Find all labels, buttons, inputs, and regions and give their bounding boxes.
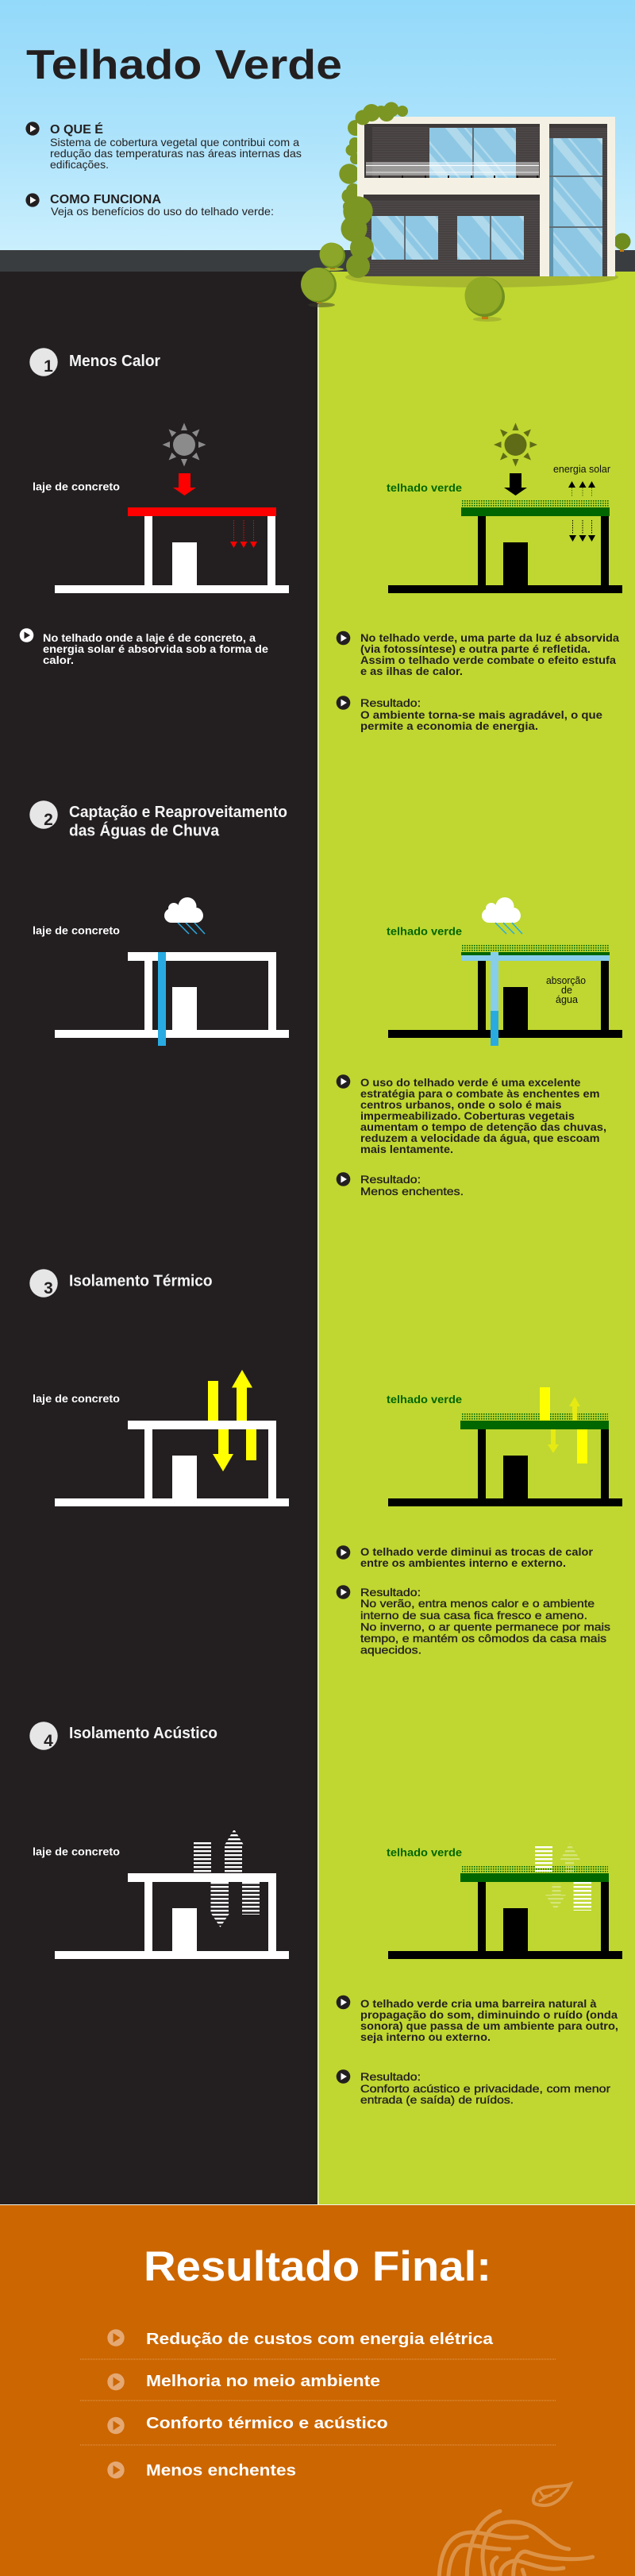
list item: enchentes: [107, 2462, 296, 2479]
arrows: reflected up: [568, 481, 595, 496]
icon: bullet: [337, 631, 350, 645]
icon: bullet: [25, 193, 40, 207]
text block: result: Resultado:: [360, 696, 421, 709]
heading: Captação e Reaproveitamento: [69, 804, 287, 821]
text block: rain explanation: estratégia para o combate às enchentes em: [360, 1087, 600, 1100]
label: laje de concreto: laje de concreto: [33, 480, 120, 492]
icon: bullet: [337, 1172, 350, 1186]
diagram: concrete house: [55, 507, 289, 593]
diagram: concrete house: [55, 1873, 289, 1959]
text block: o que é: redução das temperaturas nas áreas internas das: [50, 147, 302, 160]
text block: concrete explanation: No telhado onde a laje é de concreto, a: [43, 631, 256, 644]
text block: result: O ambiente torna-se mais agradável, o que: [360, 708, 602, 721]
text block: green roof explanation: No telhado verde, uma parte da luz é absorvida: [360, 631, 619, 644]
title: Telhado Verde: [26, 42, 342, 88]
panel: section 1 menos calor: [20, 348, 622, 732]
panel: section 2 captação de chuva: [29, 800, 622, 1197]
text block: result: Resultado:: [360, 1586, 421, 1598]
text block: rain explanation: impermeabilizado. Coberturas vegetais: [360, 1109, 575, 1122]
text block: green roof explanation: e as ilhas de calor.: [360, 665, 463, 677]
label: absorção de água: de: [561, 985, 572, 996]
icon: bullet: [337, 1996, 350, 2009]
icon: sun olive: [494, 422, 537, 467]
road band: [0, 250, 635, 272]
icon: bullet: [337, 2069, 350, 2084]
icon: leaf and swirls: [439, 2484, 593, 2575]
tree: far right: [614, 233, 630, 252]
text block: green roof explanation: [337, 631, 619, 677]
icon: bullet: [20, 628, 33, 642]
label: laje de concreto: laje de concreto: [33, 1392, 120, 1405]
icon: rain cloud right: [482, 897, 522, 934]
icon: bullet: [25, 121, 40, 136]
text block: result: No verão, entra menos calor e o ambiente: [360, 1597, 595, 1610]
diagram: green roof house: [388, 500, 622, 593]
ground shadow: [345, 267, 618, 287]
text block: acoustic explanation: seja interno ou externo.: [360, 2030, 491, 2043]
arrows: striped sound waves: [194, 1830, 260, 1927]
panel: dark left column: [0, 272, 318, 2205]
heading: Isolamento Acústico: [69, 1725, 217, 1742]
label: energia solar: energia solar: [553, 464, 610, 475]
label: absorção de água: água: [556, 994, 578, 1005]
diagram: concrete house: [55, 1421, 289, 1506]
text block: como funciona: [25, 193, 274, 218]
label: telhado verde: telhado verde: [387, 924, 462, 937]
list item: custos: Redução de custos com energia elétrica: [146, 2331, 494, 2348]
text block: result: Menos enchentes.: [360, 1185, 464, 1197]
text block: rain explanation: mais lentamente.: [360, 1143, 453, 1155]
panel: header sky: [0, 0, 635, 251]
text block: result: aquecidos.: [360, 1644, 421, 1656]
text block: rain explanation: reduzem a velocidade da água, que escoam: [360, 1132, 600, 1144]
text block: concrete explanation: [20, 628, 268, 666]
text block: o que é: O QUE É: [50, 123, 103, 137]
icon: bullet: [337, 1074, 350, 1089]
label: telhado verde: telhado verde: [387, 481, 462, 494]
text block: result: Resultado:: [360, 1173, 421, 1186]
arrows: reduced heat exchange: [540, 1387, 587, 1463]
text block: concrete explanation: energia solar é absorvida sob a forma de: [43, 642, 268, 655]
text block: o que é: [25, 121, 302, 171]
text block: result: [337, 696, 602, 732]
glass balcony rail: [366, 162, 539, 178]
label: telhado verde: telhado verde: [387, 1393, 462, 1406]
text block: o que é: edificações.: [50, 158, 109, 171]
climbing ivy in front: [341, 102, 408, 278]
text block: result: No inverno, o ar quente permanece por mais: [360, 1620, 610, 1633]
text block: result: [337, 1172, 464, 1197]
text block: result: interno de sua casa fica fresco e ameno.: [360, 1609, 587, 1622]
text block: acoustic explanation: sonora) que passa de um ambiente para outro,: [360, 2019, 618, 2032]
heading number badge: 2: [44, 811, 53, 829]
text block: acoustic explanation: O telhado verde cria uma barreira natural à: [360, 1997, 597, 2010]
text block: concrete explanation: calor.: [43, 654, 74, 666]
text block: result: [337, 1585, 610, 1656]
panel: resultado final footer: [0, 2204, 635, 2576]
label: telhado verde: telhado verde: [387, 1845, 462, 1858]
heading number badge: 3: [44, 1279, 53, 1298]
label: absorção de água: [546, 975, 586, 1005]
tree: front center: [465, 276, 505, 322]
heading: resultado final: Resultado Final:: [144, 2243, 491, 2290]
arrow: black sunlight: [504, 473, 527, 496]
heading: Menos Calor: [69, 353, 160, 370]
text block: rain explanation: aumentam o tempo de detenção das chuvas,: [360, 1120, 606, 1133]
heading: das Águas de Chuva: [69, 821, 220, 840]
heading number badge: 4: [44, 1732, 53, 1750]
arrows: red small heat: [230, 520, 257, 548]
text block: rain explanation: O uso do telhado verde é uma excelente: [360, 1076, 581, 1089]
text block: result: entrada (e saída) de ruídos.: [360, 2093, 514, 2106]
list item: enchentes: Menos enchentes: [146, 2462, 296, 2479]
tree: back left: [319, 243, 345, 271]
icon: rain cloud left: [164, 897, 205, 934]
diagram: green roof house: [388, 1866, 622, 1959]
panel: section 4 isolamento acústico: [29, 1722, 622, 2106]
arrows: absorbed down: [569, 520, 595, 542]
text block: green roof explanation: Assim o telhado verde combate o efeito estufa: [360, 654, 616, 666]
label: absorção de água: absorção: [546, 975, 586, 986]
icon: bullet: [337, 1585, 350, 1599]
illustration: house with trees: [301, 102, 630, 322]
heading: [69, 804, 287, 840]
text block: thermal explanation: O telhado verde diminui as trocas de calor: [360, 1545, 594, 1558]
text block: como funciona: COMO FUNCIONA: [50, 193, 161, 206]
text block: rain explanation: [337, 1074, 606, 1155]
diagram: concrete house with pipe: [55, 952, 289, 1046]
heading number badge: 1: [44, 357, 53, 376]
list item: conforto: Conforto térmico e acústico: [146, 2415, 388, 2432]
arrows: reduced sound waves: [535, 1843, 591, 1911]
text block: result: [337, 2069, 610, 2106]
arrows: yellow heat exchange: [208, 1370, 256, 1471]
text block: thermal explanation: entre os ambientes interno e externo.: [360, 1556, 566, 1569]
label: laje de concreto: laje de concreto: [33, 1845, 120, 1858]
heading number badge: [29, 348, 58, 376]
divider between columns: [318, 304, 319, 2205]
climbing ivy behind the frame: [339, 120, 364, 212]
text block: acoustic explanation: [337, 1996, 618, 2043]
panel: green right column: [318, 272, 635, 2205]
icon: sun gray: [162, 422, 206, 467]
text block: o que é: Sistema de cobertura vegetal que contribui com a: [50, 136, 299, 148]
heading: Isolamento Térmico: [69, 1273, 213, 1290]
icon: bullet: [337, 1545, 350, 1560]
text block: como funciona: Veja os benefícios do uso do telhado verde:: [51, 205, 274, 218]
heading number badge: [29, 800, 58, 829]
icon: bullet: [337, 696, 350, 710]
text block: green roof explanation: (via fotossíntese) e outra parte é refletida.: [360, 642, 591, 655]
heading number badge: [29, 1722, 58, 1750]
panel: section 3 isolamento térmico: [29, 1269, 622, 1656]
list item: meio ambiente: Melhoria no meio ambiente: [146, 2373, 380, 2390]
building walls: [357, 117, 615, 276]
label: laje de concreto: laje de concreto: [33, 924, 120, 937]
diagram: green roof house with pipe: [388, 945, 622, 1046]
text block: rain explanation: centros urbanos, onde o solo é mais: [360, 1098, 562, 1111]
diagram: green roof house: [388, 1413, 622, 1506]
text block: result: permite a economia de energia.: [360, 719, 538, 732]
text block: result: Resultado:: [360, 2070, 421, 2083]
text block: result: Conforto acústico e privacidade, com menor: [360, 2082, 610, 2095]
heading number badge: [29, 1269, 58, 1298]
tree: front left: [301, 268, 337, 307]
text block: acoustic explanation: propagação do som, diminuindo o ruído (onda: [360, 2008, 618, 2021]
list item: conforto: [107, 2415, 388, 2434]
windows: [371, 128, 602, 276]
arrow: red heat: [173, 473, 196, 496]
text block: result: tempo, e mantém os cômodos da casa mais: [360, 1632, 606, 1645]
text block: thermal explanation: [337, 1545, 594, 1569]
